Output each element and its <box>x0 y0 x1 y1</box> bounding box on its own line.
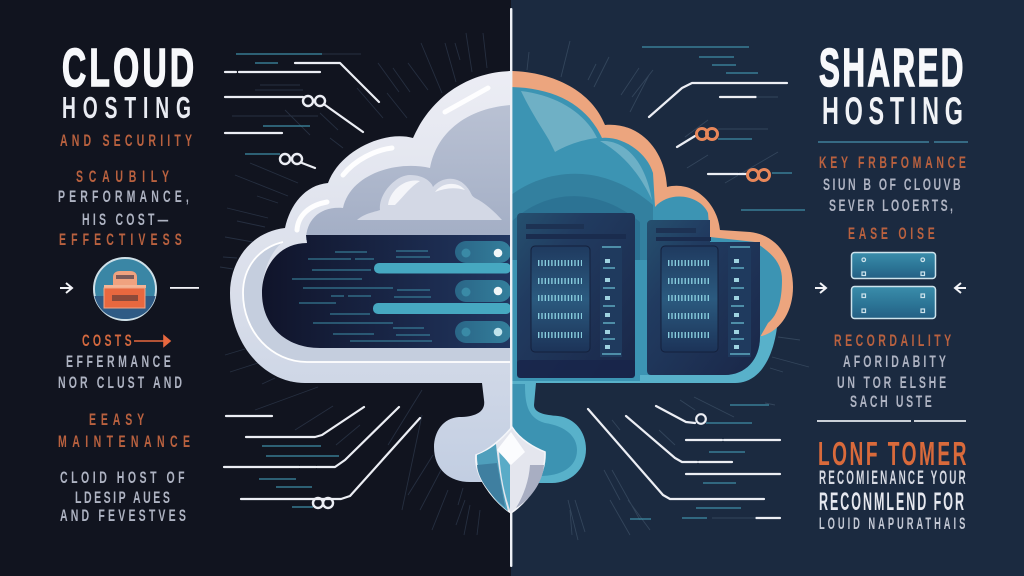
icon: server badge <box>60 258 199 320</box>
rack 2 data rows <box>668 263 710 335</box>
text block: performance: HIS COST— <box>82 209 169 229</box>
text block: costs: NOR CLUST AND <box>58 372 182 392</box>
heading: shared hosting: HOSTING <box>822 89 963 132</box>
orange outline <box>511 71 793 336</box>
text block: costs: EFFERMANCE <box>66 351 171 371</box>
icon: link rings bottom left <box>313 498 333 508</box>
text block: performance: PERFORMANCE, <box>58 186 189 206</box>
left connector lines <box>224 54 420 508</box>
subheading: ease of use: EASE OISE <box>848 223 935 243</box>
vertical divider <box>510 8 512 567</box>
text block: affordability <box>834 330 952 411</box>
text block: key performance: SEVER LOOERTS, <box>829 195 953 215</box>
central cloud: cloud hosting half <box>230 71 511 482</box>
server panel <box>262 235 511 348</box>
server pills <box>373 241 511 343</box>
text block: affordability: SACH USTE <box>850 391 932 411</box>
band around panel <box>243 242 511 362</box>
text block: closing note: LDESIP AUES <box>75 487 170 507</box>
text block: affordability: UN TOR ELSHE <box>837 372 946 392</box>
background left dark panel <box>0 0 511 576</box>
icon: orange link rings upper <box>696 128 718 140</box>
heading: cloud hosting <box>62 37 194 125</box>
light glass facet <box>521 91 597 152</box>
subheading: AND SECURIITY <box>60 130 192 150</box>
cloud inner shade <box>306 105 511 240</box>
faint radiating rays <box>220 33 809 540</box>
rack 1 data rows <box>538 263 582 335</box>
text block: long term recommendation: LOUID NAPURATHAIS <box>819 514 965 533</box>
right connector lines <box>588 47 805 519</box>
text block: long term recommendation <box>818 436 966 533</box>
cloud highlights <box>297 88 488 230</box>
data streaks <box>292 251 432 341</box>
rack 1 side indicators <box>605 259 610 349</box>
text block: costs: COSTS <box>82 330 132 350</box>
text block: costs <box>58 330 182 392</box>
text block: easy maintenance: EEASY <box>89 409 145 429</box>
background right navy panel <box>511 0 1024 576</box>
icon: server units with arrows <box>815 252 966 318</box>
icon: link rings lower <box>280 154 302 164</box>
text block: easy maintenance: MAINTENANCE <box>58 431 190 451</box>
text block: long term recommendation: RECONMLEND FOR <box>819 488 964 516</box>
icon: orange link rings lower <box>748 170 770 180</box>
heading: shared hosting: SHARED <box>819 38 963 98</box>
text block: closing note <box>60 467 186 525</box>
text block: closing note: CLOID HOST OF <box>60 467 185 487</box>
text block: affordability: AFORIDABITY <box>843 351 946 371</box>
text block: easy maintenance <box>58 409 190 451</box>
text block: closing note: AND FEVESTVES <box>60 505 186 525</box>
teal cloud fill <box>511 87 782 381</box>
text block: key performance: KEY FRBFOMANCE <box>819 152 966 172</box>
text block: performance <box>58 166 189 249</box>
rack 2 side indicators <box>734 259 739 349</box>
text block: key performance: SIUN B OF CLOUVB <box>823 174 961 194</box>
heading: shared hosting <box>819 38 963 132</box>
text block: affordability: RECORDAILITY <box>834 330 952 350</box>
heading: cloud hosting: HOSTING <box>62 92 191 125</box>
left column text <box>58 37 199 525</box>
text block: long term recommendation: RECOMIENANCE YOUR <box>819 468 966 489</box>
server rack 2 <box>647 220 760 375</box>
icon: shield <box>476 427 545 513</box>
white inner outline <box>243 242 511 362</box>
central cloud: shared hosting half <box>511 71 793 483</box>
heading: cloud hosting: CLOUD <box>62 37 194 98</box>
small inner cloud <box>357 175 502 220</box>
lower teal rim and stem <box>511 300 778 483</box>
right column text <box>815 38 968 533</box>
text block: key performance <box>819 152 966 215</box>
text block: performance: SCAUBILY <box>76 166 169 186</box>
text block: long term recommendation: LONF TOMER <box>818 436 966 472</box>
dark dome <box>511 174 653 260</box>
text block: performance: EFFECTIVESS <box>59 229 182 249</box>
server rack 1 <box>517 213 635 378</box>
icon: link rings upper <box>303 96 325 106</box>
icon: white ring <box>696 414 706 424</box>
